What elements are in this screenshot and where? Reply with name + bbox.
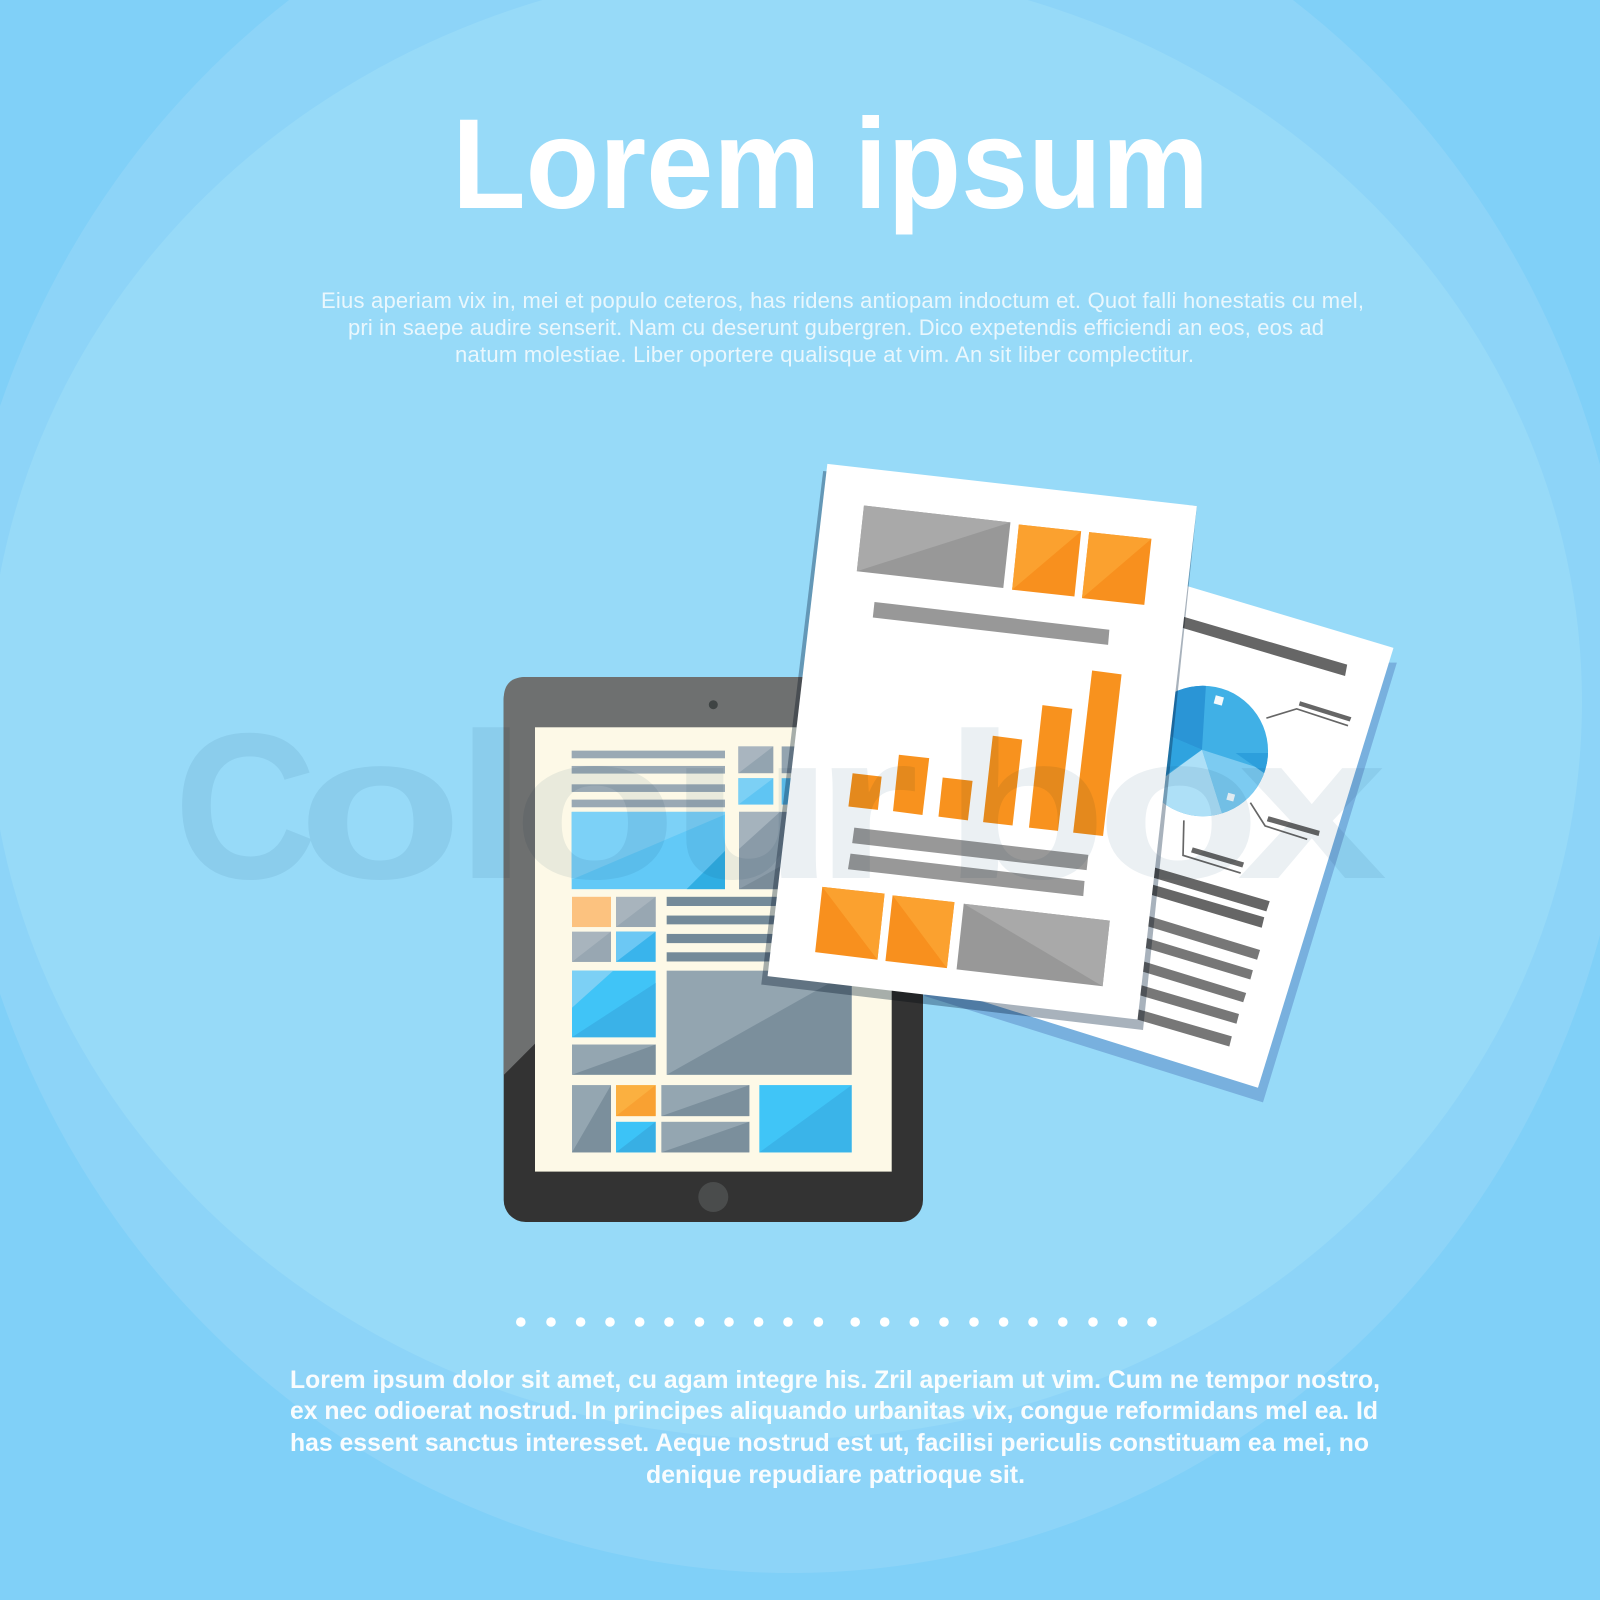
tablet body <box>504 677 923 1222</box>
tablet home button <box>698 1182 728 1212</box>
bar chart <box>848 671 1122 836</box>
watermark: olourbox <box>298 691 1387 923</box>
pie markers <box>1214 695 1224 706</box>
tablet camera <box>709 700 718 709</box>
footer text block: has essent sanctus interesset. Aeque nostrud est ut, facilisi periculis constituam ea mei, no <box>290 1429 1369 1457</box>
back page <box>952 556 1393 1088</box>
back document with pie chart <box>982 586 1394 1088</box>
intro text block: Eius aperiam vix in, mei et populo ceteros, has ridens antiopam indoctum et. Quot falli honestatis cu mel, <box>321 288 1364 313</box>
tablet gloss <box>504 677 901 1075</box>
intro text block: natum molestiae. Liber oportere qualisque at vim. An sit liber complectitur. <box>455 342 1194 367</box>
title: Lorem ipsum <box>452 93 1209 236</box>
front document with bar chart <box>761 464 1197 1030</box>
header tiles <box>857 506 1151 605</box>
tablet <box>504 677 923 1222</box>
footer text block: Lorem ipsum dolor sit amet, cu agam integre his. Zril aperiam ut vim. Cum ne tempor nostro, <box>290 1366 1380 1394</box>
footer text block: denique repudiare patrioque sit. <box>646 1461 1025 1489</box>
front page <box>768 464 1197 1020</box>
front page shadow <box>761 471 1197 1030</box>
pie chart <box>1162 686 1268 816</box>
pie labels <box>1183 701 1351 873</box>
intro text block: pri in saepe audire senserit. Nam cu deserunt gubergren. Dico expetendis efficiendi an eos, eos ad <box>348 315 1324 340</box>
footer tiles <box>815 887 1110 986</box>
back page text rows <box>1124 863 1270 1046</box>
tablet screen <box>535 727 892 1172</box>
watermark: C <box>174 689 317 922</box>
footer text block <box>290 1366 1380 1489</box>
screen layout tiles <box>572 746 852 1152</box>
back document shadow <box>924 660 1397 1102</box>
heading bar <box>873 602 1109 645</box>
caption bars <box>848 828 1088 896</box>
footer text block: ex nec odioerat nostrud. In principes aliquando urbanitas vix, congue reformidans mel ea. Id <box>290 1397 1378 1425</box>
intro text block <box>321 288 1364 367</box>
back page heading bar <box>1139 604 1347 676</box>
dotted divider <box>516 1317 1157 1327</box>
